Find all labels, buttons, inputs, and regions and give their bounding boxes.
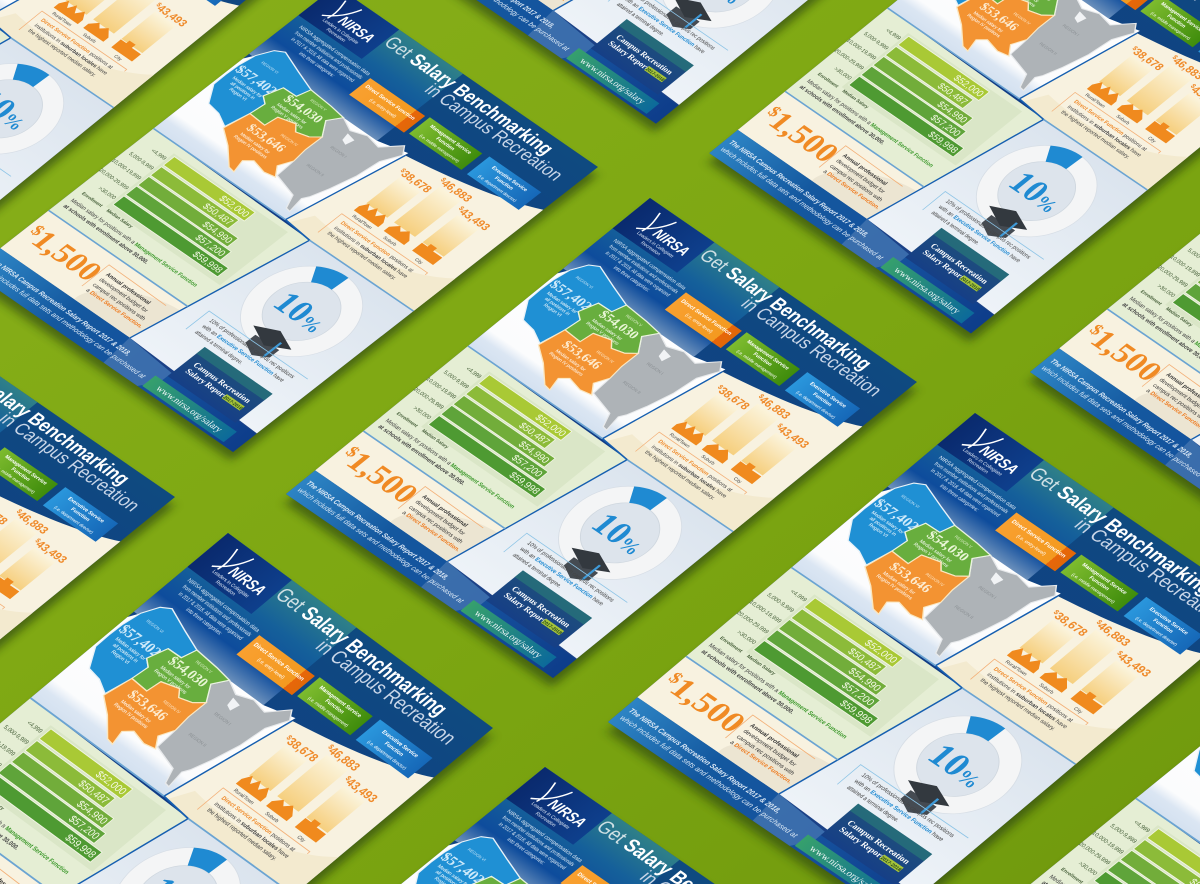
green panel axis labels: Enrollment [395, 411, 419, 429]
bar 4 [441, 405, 548, 481]
text block: management salary: Median salary for positions with a Management Service Function [383, 418, 516, 510]
map: west region: all positions in [543, 297, 571, 317]
map: south orange region: Median salary for [553, 349, 587, 373]
category box: management: (i.e. middle management) [735, 349, 779, 380]
footer text: The NIRSA Campus Recreation Salary Report 2017 & 2018, [304, 479, 451, 581]
intro paragraph: in 2017 & 2018. All data were organized [603, 251, 671, 298]
bar 2 [466, 385, 555, 448]
donut chart: 10 percent: 10% [583, 506, 657, 561]
values: $ [756, 393, 765, 400]
intro paragraph: into three categories: [612, 265, 651, 293]
icon: houses [702, 440, 734, 464]
text block: development budget [395, 487, 486, 553]
map: east gray region: REGION II [621, 380, 642, 395]
big number: 1,500: 1,500 [339, 446, 426, 509]
text block: management salary: at schools with enrollment above 30,000. [376, 424, 466, 487]
map: west region [504, 255, 640, 358]
category box: management [726, 332, 800, 386]
bar 1 [479, 375, 572, 440]
text block: development budget: campus rec positions with [407, 505, 464, 545]
report cover: Salary Report [501, 591, 549, 625]
text block: terminal degree: attained a terminal degree. [511, 553, 563, 589]
values: $ [716, 384, 724, 391]
flyer shadow [285, 207, 916, 687]
enrollment labels: 20,000-29,999 [411, 387, 445, 411]
bar: suburb [712, 403, 779, 455]
donut chart: 10 percent [533, 467, 707, 598]
locale labels: City [731, 476, 743, 485]
green panel axis labels: Median Salary [420, 429, 450, 450]
enrollment labels: <4,999 [464, 367, 482, 380]
values: 38,678 [715, 386, 752, 412]
category box: direct service [665, 292, 742, 348]
logo box: Leaders in Collegiate [635, 231, 675, 259]
map: south orange region: REGION IV [595, 349, 616, 364]
callout: direct service: Direct Service Function positions at [656, 439, 734, 493]
flyer: center, fully labelled [279, 198, 923, 687]
flyer: lower left [0, 527, 510, 884]
intro paragraph: from member institutions and professionals [607, 244, 680, 295]
bar 5 [428, 416, 546, 498]
bar chart: salary by locale [662, 373, 822, 493]
map: south orange region: Region IV positions [547, 351, 585, 378]
header teal overlay [563, 198, 779, 358]
flyer: far right [1023, 76, 1200, 565]
category box: executive: Executive Service [808, 381, 847, 409]
locale labels: Suburb [699, 454, 716, 467]
map: south orange region: $53,646 [559, 337, 606, 372]
text block: development budget: a Direct Service Function. [400, 510, 461, 553]
category box: direct service: (i.e. entry-level) [683, 313, 714, 335]
text block: terminal degree: with an Executive Service Function have [517, 546, 605, 607]
category box: executive [785, 372, 860, 427]
report cover [486, 570, 592, 648]
cream wedge [604, 409, 775, 532]
bar values: $50,487 [516, 421, 552, 447]
values [712, 373, 822, 452]
locale labels [668, 432, 743, 485]
text block: terminal degree [504, 533, 627, 621]
enrollment labels: 10,000-19,999 [424, 377, 457, 400]
heading: Get Salary Benchmarking [694, 246, 877, 374]
values: 46,883 [756, 395, 793, 422]
icon: graduation cap [551, 540, 618, 590]
green panel axis labels [395, 411, 450, 450]
enrollment labels: 5,000-9,999 [441, 370, 470, 390]
map: west region: Median salary for [545, 291, 579, 315]
flyer: far left [0, 313, 181, 802]
category box: executive: Function [811, 392, 833, 408]
panel: map background [468, 254, 736, 453]
bar values: $54,990 [515, 440, 552, 466]
category box: executive: (i.e. department director) [795, 390, 837, 420]
flyer: bottom right [937, 643, 1200, 884]
category box: management: Management Service [745, 339, 790, 371]
values: 43,493 [775, 424, 811, 451]
map: central green region: Median salary for [590, 318, 624, 342]
url bar: www.nirsa.org/salary [471, 609, 545, 660]
bar: rural [684, 394, 738, 436]
map: east gray region: REGION I [645, 362, 665, 376]
map: central green region: Region V positions [584, 321, 621, 347]
text block: terminal degree: 10% of professionals in campus rec positions [525, 541, 615, 603]
callout: direct service [635, 432, 747, 512]
map: east gray region [563, 320, 727, 445]
budget wedge [390, 488, 497, 567]
footer highlight [418, 561, 494, 617]
intro paragraph: NIRSA aggregated compensation data [611, 238, 688, 292]
text block: development budget: Annual professional [420, 494, 469, 529]
map: west region: REGION VI [574, 275, 595, 290]
flyer: top left [0, 0, 297, 259]
enrollment labels [399, 356, 482, 421]
map: central green region: $54,030 [596, 307, 643, 342]
enrollment labels: >30,000 [411, 406, 432, 421]
flyer: top center [390, 0, 1014, 133]
locale labels: Rural/Town [668, 432, 691, 449]
bar: city [741, 433, 797, 475]
logo box: Recreation [639, 240, 662, 257]
map: west region: Region VI [542, 303, 563, 318]
footer band [286, 470, 582, 678]
lakes [655, 349, 673, 362]
logo box [613, 198, 714, 273]
text block: development budget: development budget for [413, 500, 466, 537]
dividers [315, 265, 835, 654]
icon: trees [671, 418, 709, 446]
map: central green region: REGION V [624, 313, 644, 328]
callout: direct service: institutions in suburban locales have [649, 445, 728, 499]
heading: in Campus Recreation [737, 294, 887, 400]
bar values: $59,998 [506, 470, 542, 496]
report cover: Campus Recreation [509, 584, 573, 629]
panel: cream budget [315, 431, 505, 568]
values: $ [775, 423, 784, 430]
bar values: $52,000 [532, 413, 569, 439]
report cover: 2017-2018 [540, 619, 563, 636]
flyer: bottom center [159, 767, 829, 884]
flyer: lower right [588, 410, 1200, 884]
flyer: top right [702, 0, 1200, 343]
logo box: NIRSA [648, 227, 693, 259]
icon: city buildings [731, 459, 765, 484]
bar chart: median salary by enrollment [421, 371, 605, 507]
category box: direct service: Direct Service Function [679, 299, 733, 337]
map: south orange region [514, 312, 641, 408]
map: west region: $57,402 [546, 277, 596, 313]
panel: green median salary [363, 346, 630, 543]
bar values: $57,200 [508, 453, 545, 480]
bar values [478, 410, 592, 496]
flyer: upper left [0, 0, 606, 464]
map: central green region [559, 290, 665, 369]
flyer base [286, 198, 917, 678]
panel: cream salary [600, 335, 862, 532]
footer text: which includes full data sets and methodology can be purchased at [295, 486, 467, 605]
url bar [460, 600, 557, 668]
panel: blue-gray degree [442, 439, 733, 659]
bar 3 [453, 395, 555, 467]
big number: 1,500: $ [341, 443, 365, 461]
category box: management: Function [751, 352, 773, 368]
callout: direct service: the highest reported median salary. [643, 450, 717, 501]
